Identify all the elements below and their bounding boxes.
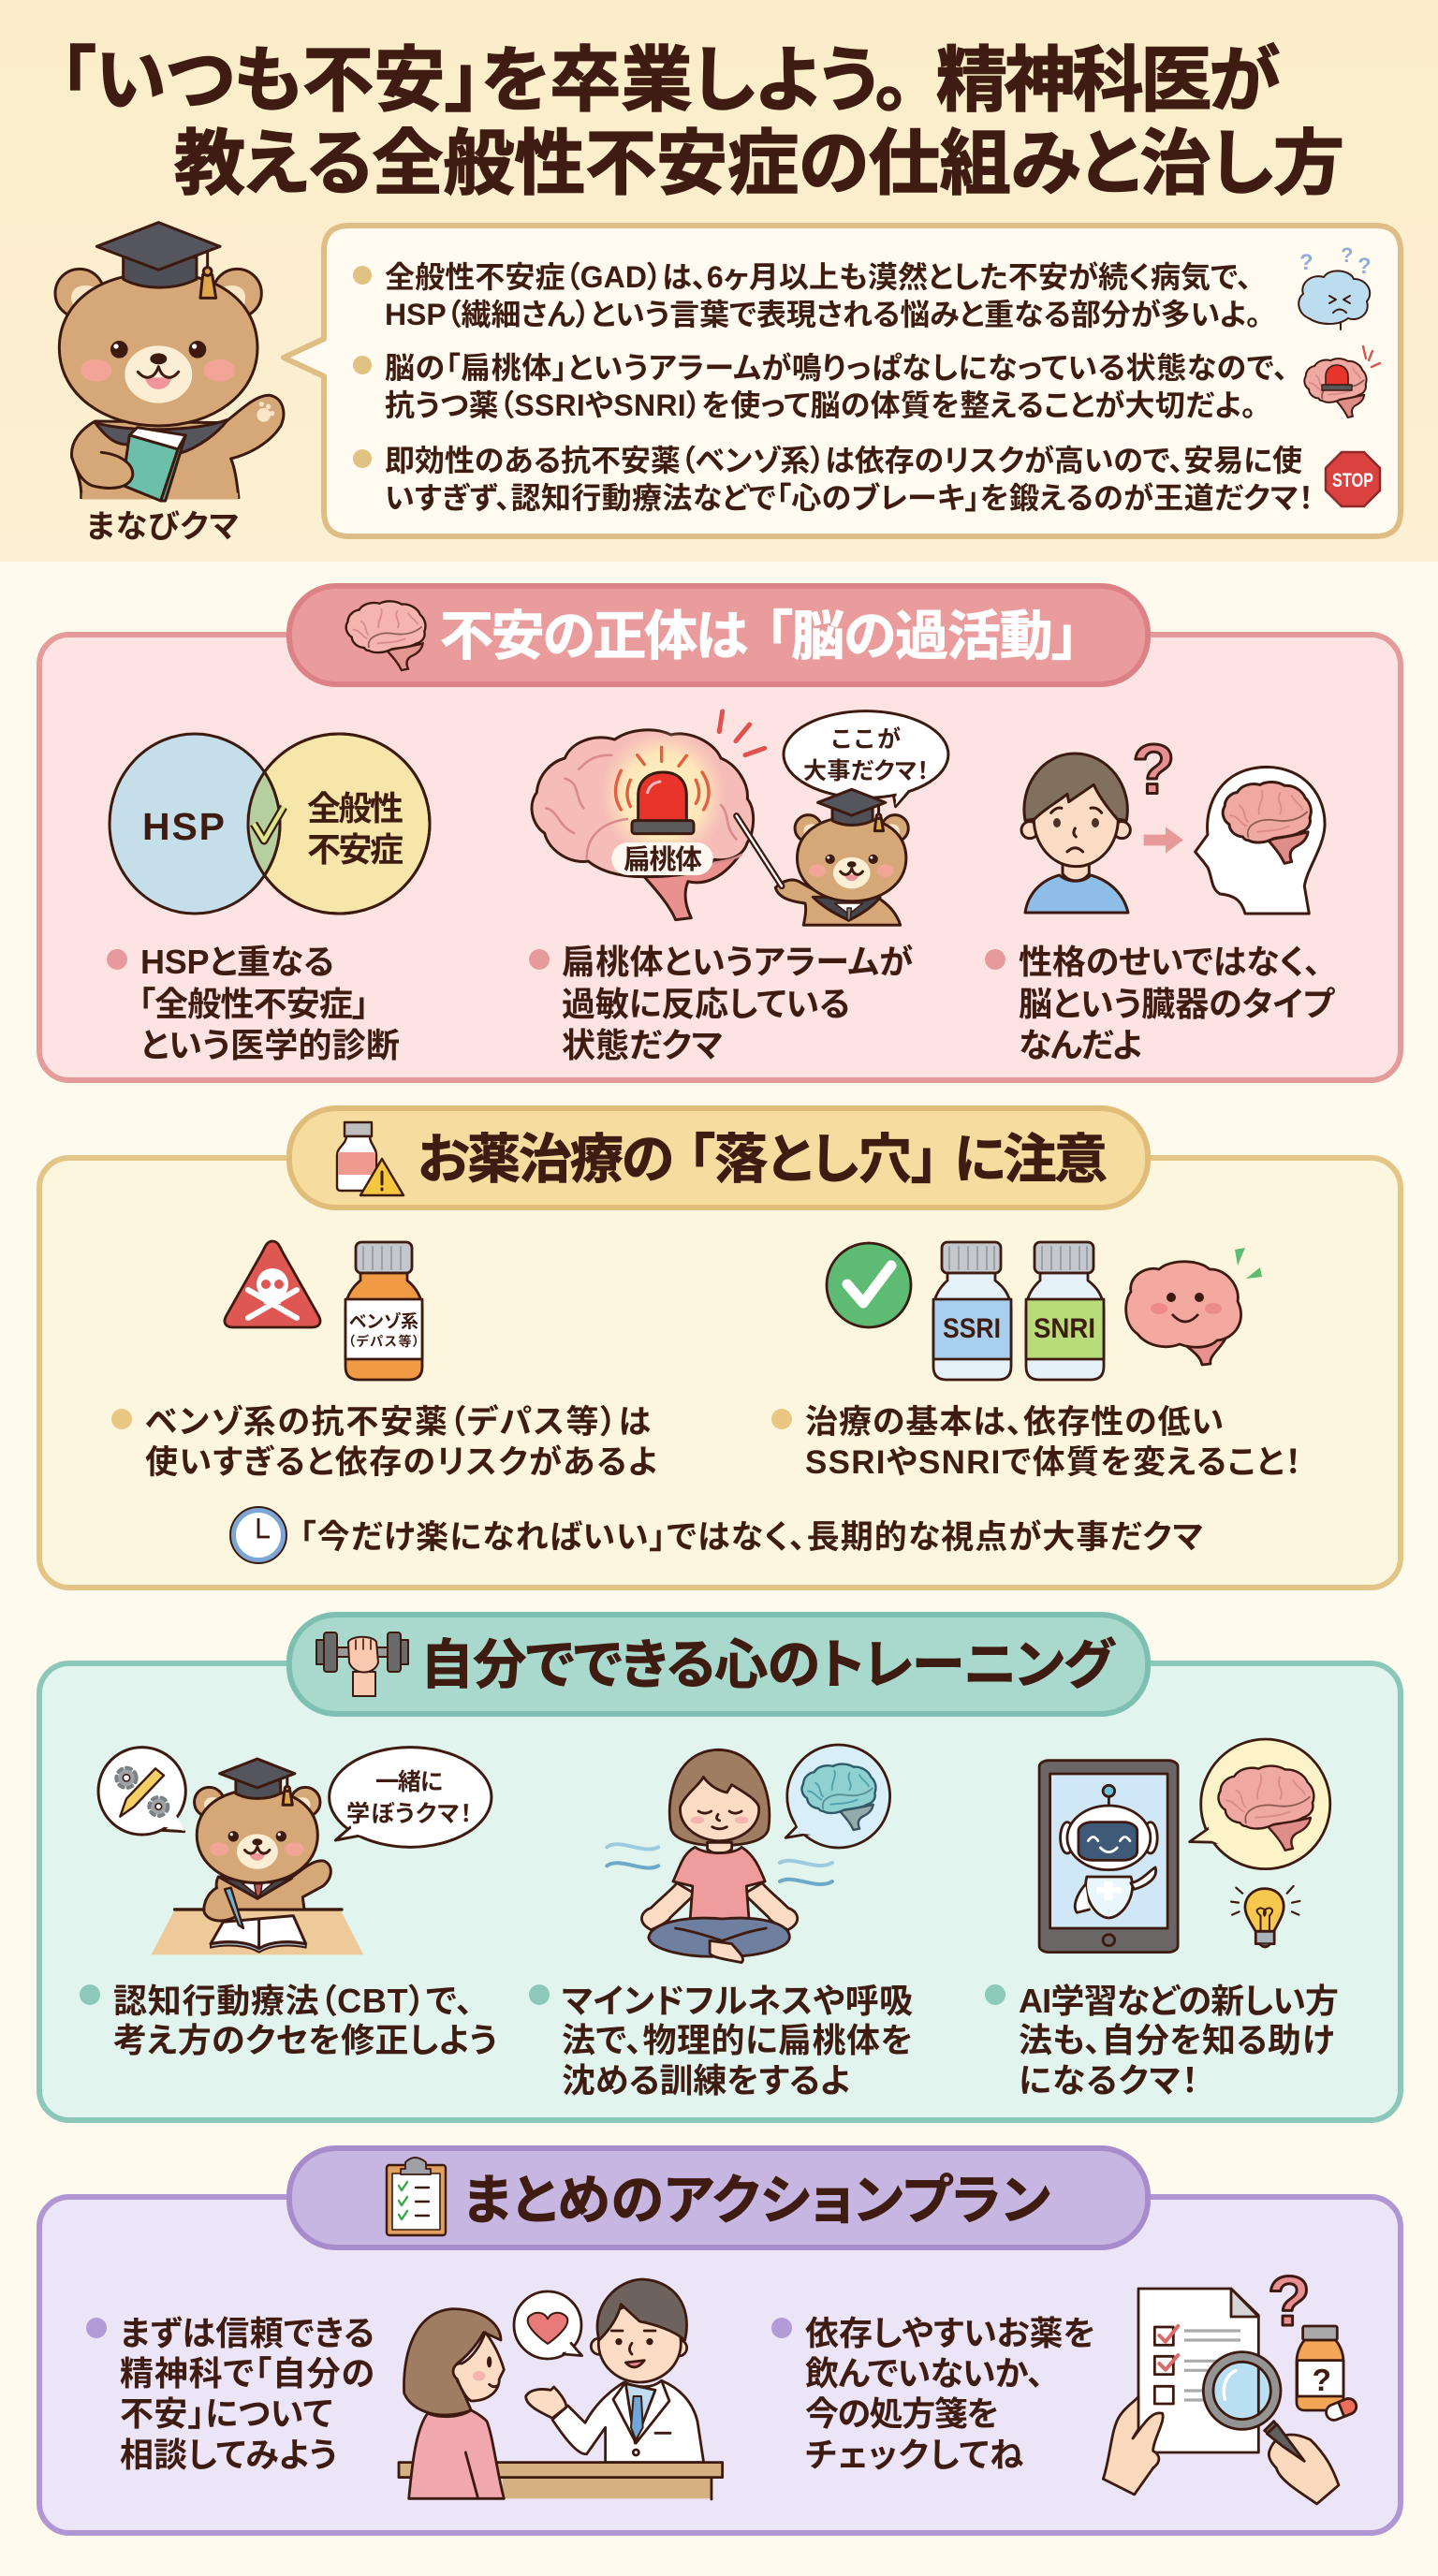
- bullet: AI learning: になるクマ！: [1019, 2061, 1198, 2100]
- title: 精神科医が: [936, 41, 1280, 121]
- panel: brain overactivity: [39, 586, 1401, 1080]
- icon: worried blue brain: ?: [1357, 254, 1372, 279]
- bullet texts: [80, 1982, 1339, 2100]
- illustration: bear studying: 学ぼうクマ！: [346, 1801, 472, 1827]
- bullet: consult: 精神科で「自分の: [120, 2354, 374, 2393]
- mascot: graduation bear with book: [55, 223, 284, 501]
- icon: worried blue brain: [1299, 243, 1372, 329]
- bullet: amygdala: [529, 943, 913, 1064]
- bullet: mindfulness: 法で、物理的に扁桃体を: [562, 2021, 913, 2059]
- bullet 1: [353, 260, 1261, 331]
- bullet: mindfulness: マインドフルネスや呼吸: [562, 1982, 913, 2020]
- icon: SSRI bottle: SSRI: [943, 1313, 1001, 1344]
- bullet: amygdala: 状態だクマ: [562, 1026, 723, 1064]
- icon: brain with alarm: [1304, 346, 1380, 417]
- bullet: personality: [985, 943, 1336, 1064]
- icon: benzo bottle: ベンゾ系: [349, 1311, 418, 1332]
- bullet: consult: [86, 2314, 374, 2474]
- bullet: HSP: 「全般性不安症」: [139, 985, 369, 1023]
- bullet: prescription check: 飲んでいないか、: [805, 2354, 1044, 2393]
- illustration: doctor consultation: [399, 2279, 723, 2499]
- bullet: prescription check: チェックしてね: [805, 2436, 1023, 2474]
- illustration: bear studying: 一緒に: [375, 1769, 443, 1795]
- bullet texts: [107, 943, 1336, 1064]
- bullet: benzo: [111, 1403, 657, 1481]
- bullet: benzo: 使いすぎると依存のリスクがあるよ: [145, 1444, 657, 1481]
- bullet: AI learning: 法も、自分を知る助け: [1019, 2021, 1334, 2059]
- bullet: HSP: という医学的診断: [140, 1026, 400, 1064]
- bullet: personality: 性格のせいではなく、: [1019, 943, 1321, 981]
- bullet: HSP: HSPと重なる: [140, 943, 334, 981]
- bullet: consult: まずは信頼できる: [120, 2314, 374, 2352]
- illustration: checking prescription: ?: [1313, 2364, 1331, 2398]
- bullet: mindfulness: [529, 1982, 913, 2100]
- heading text: [440, 607, 1078, 666]
- heading text: 不安の正体は: [440, 607, 748, 666]
- bullet: HSP: [107, 943, 400, 1064]
- heading text: に注意: [954, 1130, 1108, 1190]
- icon: green check: [827, 1243, 911, 1327]
- icon: stop sign: [1326, 452, 1380, 506]
- venn diagram: 全般性: [307, 789, 404, 827]
- icon: dumbbell fist: [316, 1632, 408, 1696]
- bullet: SSRI SNRI: [771, 1404, 1301, 1481]
- bullet: CBT: 考え方のクセを修正しよう: [113, 2021, 497, 2059]
- bullet 1: HSP（繊細さん）という言葉で表現される悩みと重なる部分が多いよ。: [385, 298, 1261, 331]
- icon: benzo bottle: [345, 1242, 422, 1380]
- bullet: prescription check: 依存しやすいお薬を: [805, 2314, 1095, 2352]
- icon: danger skull triangle: [225, 1241, 320, 1327]
- illustration: checking prescription: [1103, 2261, 1358, 2504]
- bullet: CBT: [80, 1982, 497, 2059]
- bullet 3: いすぎず、認知行動療法などで「心のブレーキ」を鍛えるのが王道だクマ！: [385, 481, 1313, 515]
- heading text: [418, 1130, 1108, 1190]
- icon: SNRI bottle: [1026, 1242, 1104, 1380]
- bullet: prescription check: [771, 2314, 1095, 2474]
- panel: action plan: [39, 2148, 1401, 2533]
- venn diagram: HSP: [142, 805, 225, 848]
- icon: benzo bottle: （デパス等）: [348, 1334, 419, 1349]
- callout: long-term view: 「今だけ楽になればいい」ではなく、長期的な視点が大事だクマ: [300, 1519, 1203, 1556]
- bullet: SSRI SNRI: 治療の基本は、依存性の低い: [805, 1404, 1224, 1441]
- bullet: prescription check: 今の処方箋を: [805, 2394, 999, 2433]
- bullet 3: 即効性のある抗不安薬（ベンゾ系）は依存のリスクが高いので、安易に使: [385, 444, 1302, 477]
- bullet: personality: 脳という臓器のタイプ: [1019, 985, 1336, 1023]
- bullet: AI learning: AI学習などの新しい方: [1019, 1982, 1339, 2020]
- heading text: 自分でできる心のトレーニング: [420, 1635, 1116, 1695]
- intro speech box: [284, 226, 1401, 536]
- bullet: personality: なんだよ: [1019, 1026, 1142, 1064]
- illustration: AI on tablet: [1039, 1739, 1330, 1953]
- mascot name: まなびクマ: [86, 509, 239, 545]
- heading text: まとめのアクションプラン: [463, 2171, 1050, 2231]
- illustration: alarm in the brain with bear: 扁桃体: [624, 844, 702, 875]
- bullet: amygdala: 過敏に反応している: [562, 985, 850, 1023]
- panel: self training: [39, 1615, 1401, 2120]
- icon: smiling brain: [1126, 1248, 1262, 1365]
- icon: bottle with warning: [337, 1122, 404, 1195]
- heading pill: [289, 586, 1148, 684]
- illustration: checking prescription: ?: [1268, 2261, 1311, 2340]
- icon: worried blue brain: ?: [1341, 243, 1353, 267]
- bullet 2: [353, 351, 1288, 422]
- heading pill: [289, 1108, 1148, 1208]
- panel: medication pitfalls: [39, 1108, 1401, 1588]
- heading text: お薬治療の: [418, 1130, 674, 1190]
- bullet: AI learning: [985, 1982, 1339, 2100]
- bullet 3: [353, 444, 1313, 515]
- bullet 2: 抗うつ薬（SSRIやSNRI）を使って脳の体質を整えることが大切だよ。: [385, 388, 1256, 422]
- bullet: consult: 不安」について: [120, 2394, 332, 2433]
- icon: SSRI bottle: [933, 1242, 1011, 1380]
- bullet: consult: 相談してみよう: [120, 2436, 337, 2474]
- icon: worried blue brain: ?: [1299, 250, 1313, 275]
- illustration: alarm in the brain with bear: [532, 711, 948, 925]
- icon: brain: [346, 601, 425, 670]
- icon: SNRI bottle: SNRI: [1034, 1313, 1095, 1344]
- header band: [0, 0, 1438, 562]
- illustration: boy, arrow and head with brain: [1021, 729, 1325, 914]
- heading text: 「落とし穴」: [688, 1130, 938, 1190]
- illustration: alarm in the brain with bear: 大事だクマ！: [803, 758, 929, 784]
- title: 教える全般性不安症の仕組みと治し方: [174, 124, 1344, 204]
- bullet: mindfulness: 沈める訓練をするよ: [562, 2061, 850, 2100]
- heading pill: [289, 1615, 1148, 1714]
- icon: stop sign: STOP: [1332, 470, 1373, 491]
- icon: clipboard: [387, 2158, 446, 2235]
- bullet: amygdala: 扁桃体というアラームが: [562, 943, 913, 981]
- title: 「いつも不安」を卒業しよう。: [60, 41, 910, 121]
- callout: long-term view: [230, 1507, 1203, 1563]
- title: [60, 41, 1344, 204]
- bullet: CBT: 認知行動療法（CBT）で、: [113, 1982, 473, 2020]
- venn diagram: [110, 734, 430, 914]
- heading pill: [289, 2148, 1148, 2247]
- bullet 2: 脳の「扁桃体」というアラームが鳴りっぱなしになっている状態なので、: [385, 351, 1288, 385]
- bullet 1: 全般性不安症（GAD）は、6ヶ月以上も漠然とした不安が続く病気で、: [385, 260, 1252, 294]
- bullet: benzo: ベンゾ系の抗不安薬（デパス等）は: [145, 1403, 651, 1441]
- illustration: meditating woman: [607, 1745, 890, 1963]
- bullet: SSRI SNRI: SSRIやSNRIで体質を変えること！: [805, 1444, 1301, 1481]
- venn diagram: 不安症: [307, 830, 404, 869]
- illustration: alarm in the brain with bear: ここが: [831, 725, 901, 753]
- illustration: bear studying: [98, 1748, 492, 1954]
- heading text: 「脳の過活動」: [766, 607, 1078, 666]
- illustration: boy, arrow and head with brain: ?: [1132, 729, 1175, 808]
